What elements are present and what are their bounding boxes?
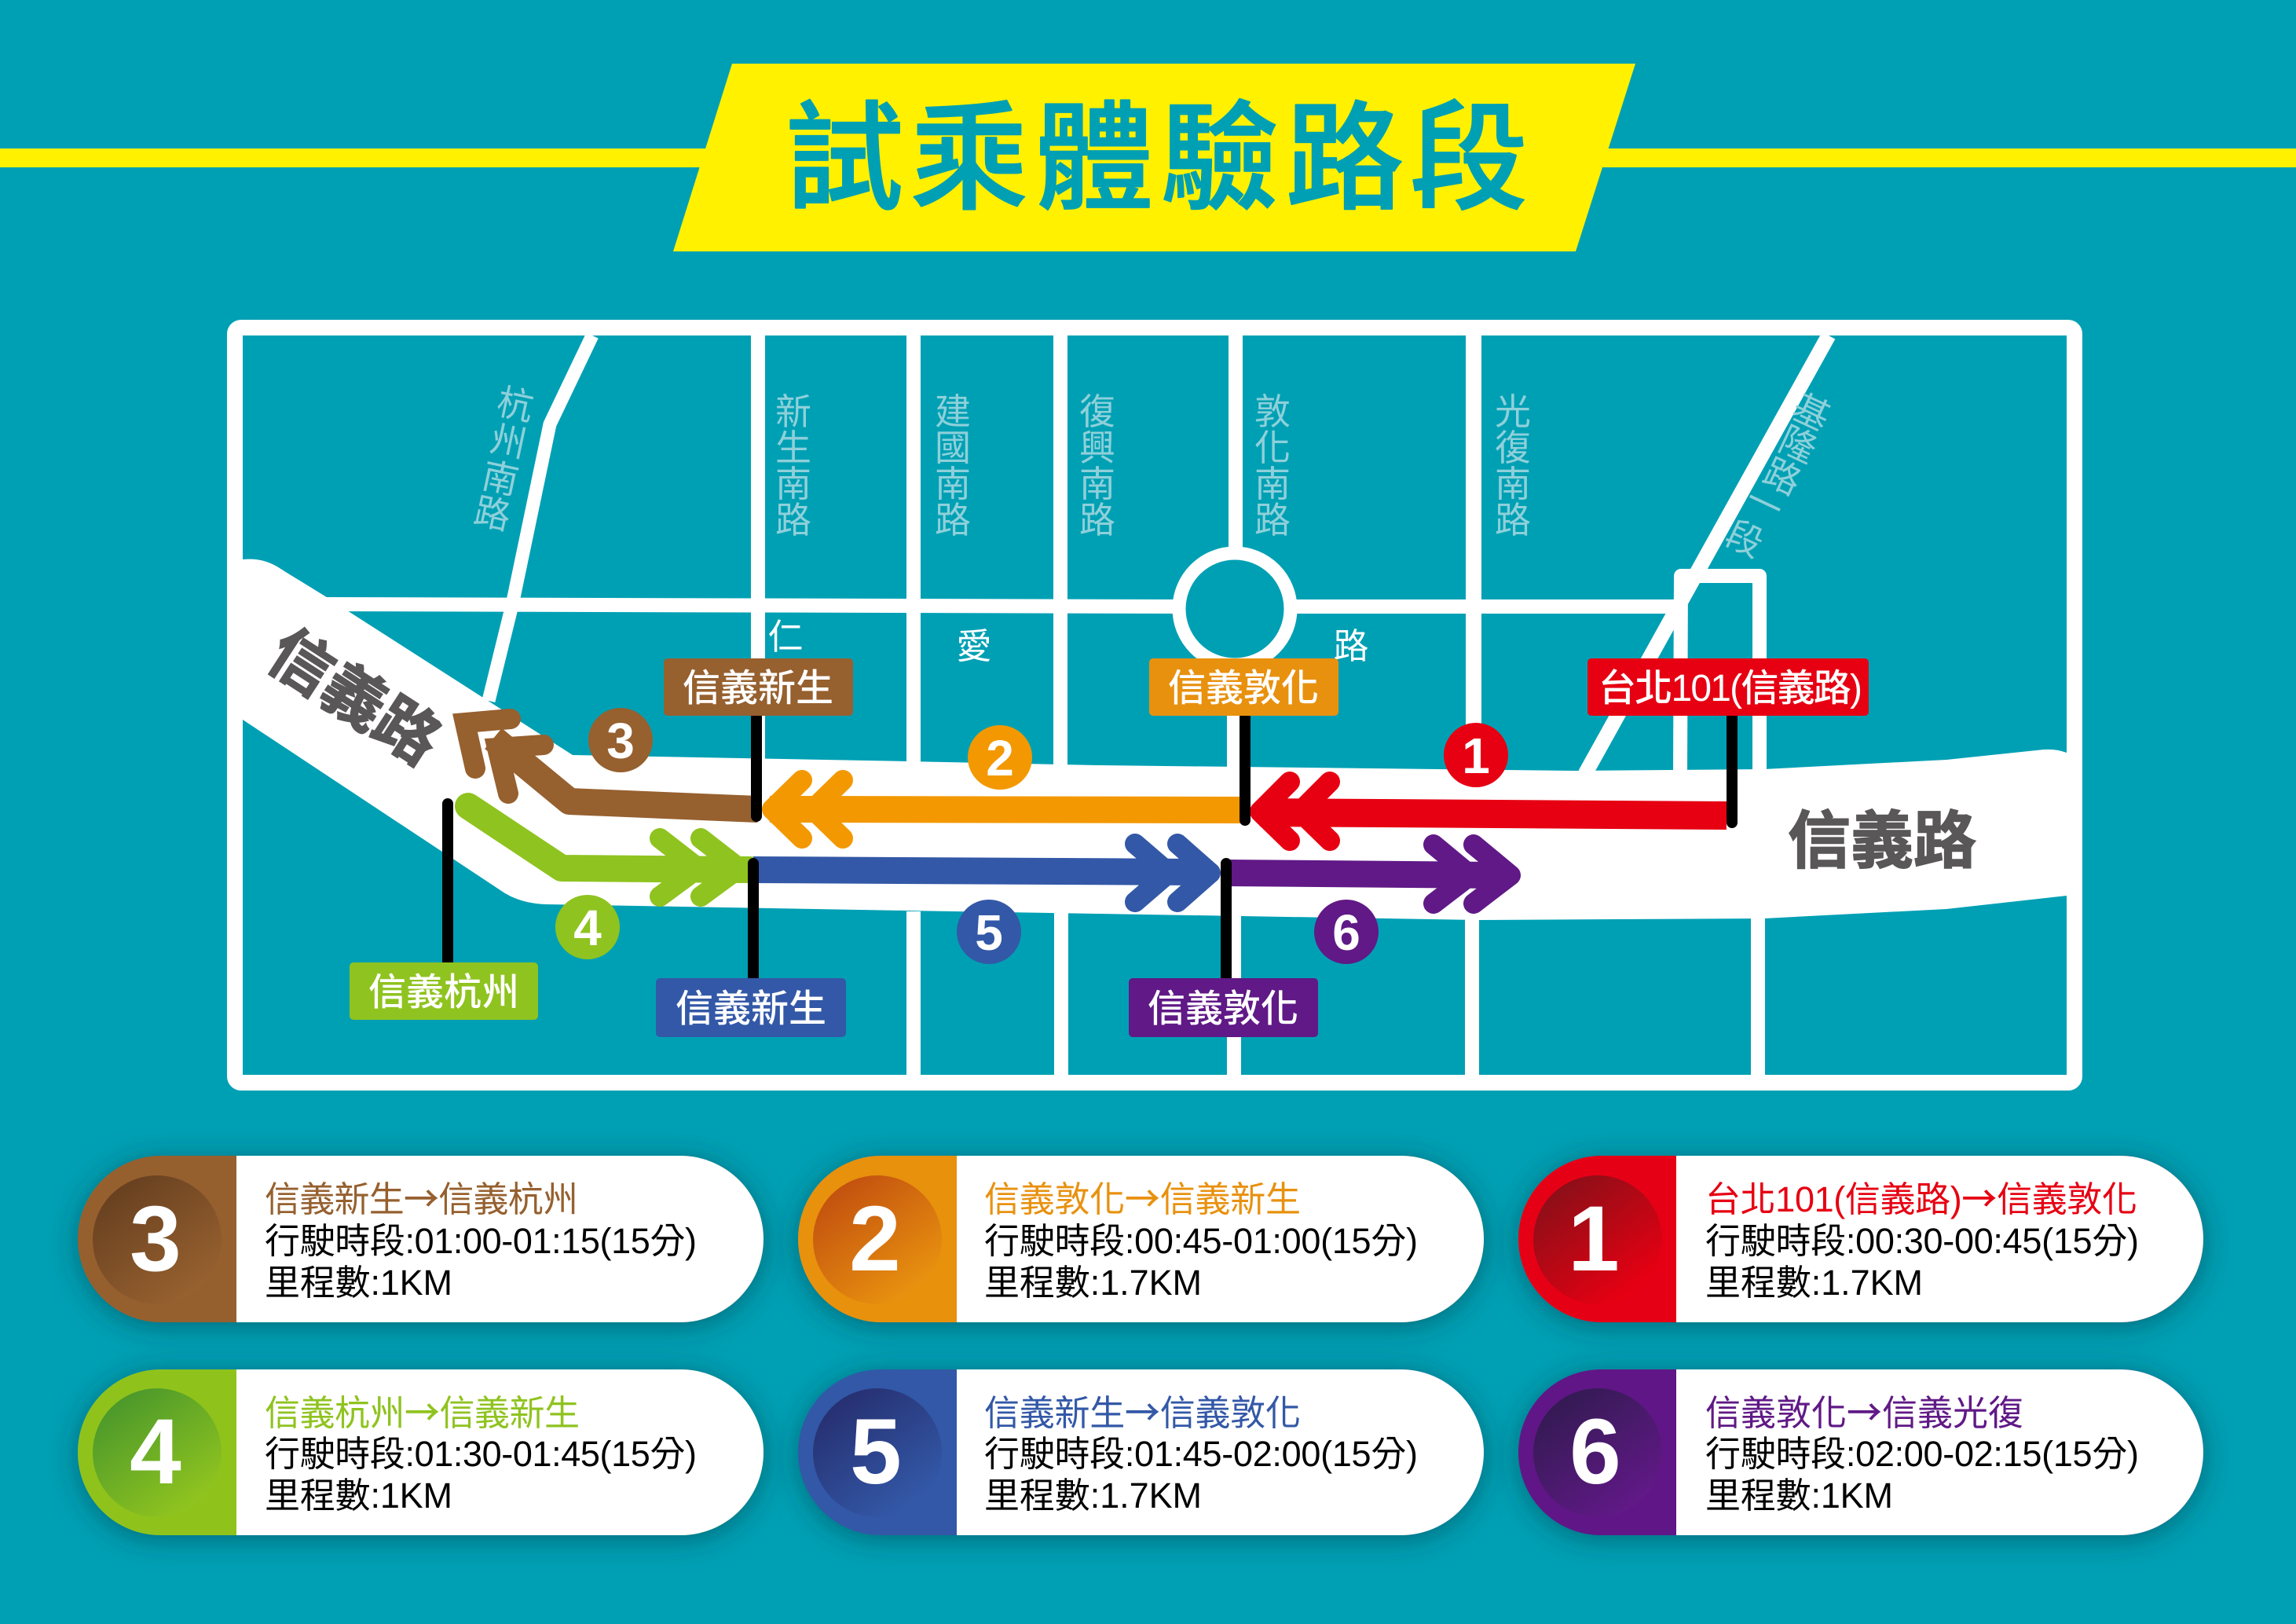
card 5: [798, 1369, 1484, 1535]
card 4 text: 里程數:1KM: [265, 1476, 452, 1516]
station label: 信義新生 brown: [664, 658, 853, 716]
card 3 text: 里程數:1KM: [265, 1263, 452, 1303]
route map: [235, 328, 2074, 1083]
card 4: [78, 1369, 764, 1535]
number badge 3: 3: [606, 713, 635, 769]
street names: 段: [1719, 513, 1770, 565]
card 2: [798, 1156, 1484, 1322]
card 4: 4: [130, 1400, 181, 1504]
arrow 1 red: [1260, 782, 1727, 841]
card 3 text: [265, 1171, 697, 1303]
street names: 州: [486, 418, 530, 465]
street names: 隆: [1773, 419, 1823, 471]
number badge 3: [588, 708, 653, 772]
arrow 5 blue: [753, 844, 1210, 902]
card 2 text: [984, 1171, 1418, 1303]
street names: 仁愛路: [767, 617, 1369, 666]
station label: 信義敦化 purple: 信義敦化: [1148, 988, 1298, 1030]
street names: 建國南路: [935, 391, 971, 541]
street names: 杭: [493, 381, 537, 428]
number badge 1: 1: [1462, 728, 1490, 784]
street names: [471, 381, 1836, 666]
card 5 text: 行駛時段:01:45-02:00(15分): [984, 1434, 1418, 1474]
street names: 新生南路: [775, 391, 811, 541]
number badge 5: 5: [975, 904, 1003, 961]
station label: 信義杭州 green: 信義杭州: [368, 972, 519, 1014]
card 3 text: 行駛時段:01:00-01:15(15分): [265, 1221, 697, 1261]
card 4 text: [265, 1384, 697, 1516]
card 5: 5: [850, 1400, 902, 1504]
card 5 text: [984, 1384, 1418, 1516]
card 1 text: 台北101(信義路)→信義敦化: [1705, 1171, 2137, 1222]
station label: 信義新生 blue: [656, 978, 846, 1037]
number badge 6: 6: [1332, 904, 1360, 961]
title: 試乘體驗路段: [785, 64, 1528, 234]
card 4 text: 行駛時段:01:30-01:45(15分): [265, 1434, 697, 1474]
card 6 text: [1705, 1384, 2139, 1516]
street names: 一: [1739, 478, 1789, 530]
card 2 text: 行駛時段:00:45-01:00(15分): [984, 1221, 1418, 1261]
station label: 台北101 red: [1587, 658, 1869, 716]
card 2 text: 信義敦化→信義新生: [984, 1171, 1301, 1222]
card 1: 1: [1568, 1187, 1620, 1291]
station label: 信義新生 blue: 信義新生: [676, 988, 826, 1030]
street names: 基: [1786, 387, 1836, 438]
number badge 2: 2: [986, 730, 1014, 786]
street names: 復興南路: [1079, 391, 1115, 541]
leader lines: [448, 711, 1732, 982]
title banner: [0, 64, 2296, 251]
station label: 信義杭州 green: [350, 962, 538, 1020]
station label: 台北101 red: 台北101(信義路): [1598, 668, 1862, 709]
number badge 5: [957, 900, 1021, 964]
arrow 2 orange: [770, 780, 1249, 838]
road name: left: 信義路: [256, 617, 452, 778]
card 3: [78, 1156, 764, 1322]
station label: 信義敦化 orange: 信義敦化: [1168, 668, 1319, 709]
number badge 4: 4: [573, 900, 602, 956]
card 2: 2: [849, 1187, 901, 1291]
card 4 text: 信義杭州→信義新生: [265, 1384, 580, 1435]
main road Xinyi Road: [243, 559, 2067, 920]
street names: 敦化南路: [1254, 391, 1291, 541]
street names: 南: [478, 455, 522, 502]
arrow 4 green: [468, 806, 750, 896]
card 1 text: 里程數:1.7KM: [1705, 1263, 1923, 1303]
card 6: 6: [1569, 1400, 1621, 1504]
station label: 信義敦化 purple: [1129, 978, 1318, 1037]
card 6 text: 行駛時段:02:00-02:15(15分): [1705, 1434, 2139, 1474]
card 2 text: 里程數:1.7KM: [984, 1263, 1202, 1303]
card 6: [1518, 1369, 2203, 1535]
road name: right: 信義路: [1788, 806, 1976, 876]
street names: 路: [471, 490, 514, 537]
card 6 text: 信義敦化→信義光復: [1705, 1384, 2023, 1435]
card 3: 3: [130, 1187, 181, 1291]
card 1 text: 行駛時段:00:30-00:45(15分): [1705, 1221, 2139, 1261]
station label: 信義新生 brown: 信義新生: [683, 668, 833, 709]
street names: 光復南路: [1495, 391, 1531, 541]
card 1 text: [1705, 1171, 2139, 1303]
station label: 信義敦化 orange: [1149, 658, 1338, 716]
number badge 6: [1314, 900, 1379, 964]
card 5 text: 里程數:1.7KM: [984, 1476, 1202, 1516]
card 1: [1518, 1156, 2203, 1322]
arrow 3 brown: [465, 719, 758, 809]
card 3 text: 信義新生→信義杭州: [265, 1171, 578, 1222]
arrow 6 purple: [1225, 845, 1511, 904]
street names: 路: [1757, 451, 1807, 503]
number badge 4: [555, 895, 620, 959]
number badge 1: [1444, 723, 1508, 787]
card 5 text: 信義新生→信義敦化: [984, 1384, 1301, 1435]
street grid: [235, 328, 2074, 1083]
number badge 2: [968, 725, 1032, 790]
card 6 text: 里程數:1KM: [1705, 1476, 1893, 1516]
